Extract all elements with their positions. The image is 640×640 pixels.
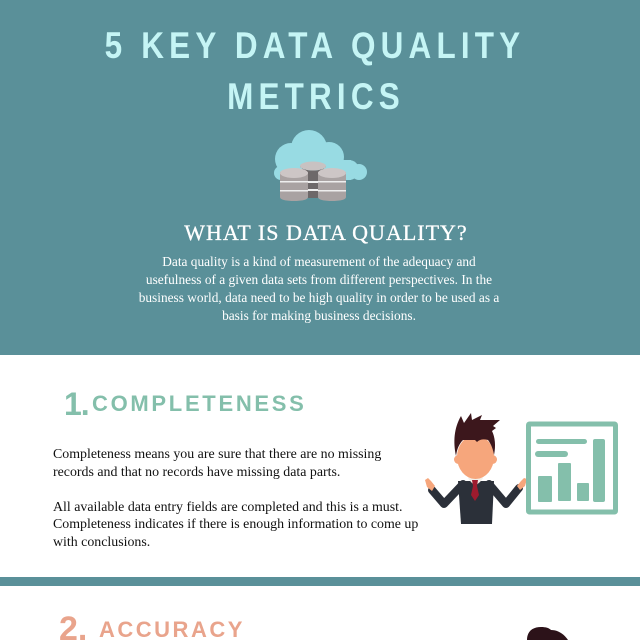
section 1 heading bbox=[64, 386, 307, 422]
divider band bbox=[0, 577, 640, 586]
heading completeness: COMPLETENESS bbox=[92, 391, 307, 416]
intro text: Data quality is a kind of measurement of the adequacy and bbox=[162, 254, 476, 269]
section 1 text: All available data entry fields are completed and this is a must. bbox=[53, 500, 402, 515]
section 2 heading bbox=[59, 612, 245, 640]
illustration: businessman bbox=[425, 413, 526, 524]
icon: cloud database bbox=[274, 130, 367, 201]
intro text: business world, data need to be high quality in order to be used as a bbox=[139, 290, 499, 305]
section 1 text: Completeness indicates if there is enough information to come up bbox=[53, 517, 418, 532]
illustration: chart board bbox=[526, 422, 618, 514]
number 1: 1. bbox=[64, 386, 89, 422]
illustration: woman hair bbox=[527, 627, 568, 640]
title second line: METRICS bbox=[227, 76, 405, 117]
section 1 text: with conclusions. bbox=[53, 535, 150, 550]
section 1 text: records and that no records have missing data parts. bbox=[53, 465, 340, 480]
section 1 text: Completeness means you are sure that there are no missing bbox=[53, 447, 381, 462]
header panel bbox=[0, 0, 640, 355]
intro text bbox=[138, 254, 500, 323]
intro text: basis for making business decisions. bbox=[222, 308, 416, 323]
section 1 text bbox=[53, 447, 418, 550]
intro text: usefulness of a given data sets from different perspectives. In the bbox=[146, 272, 492, 287]
title: 5 KEY DATA QUALITY bbox=[105, 25, 525, 66]
subheading: WHAT IS DATA QUALITY? bbox=[184, 220, 468, 245]
